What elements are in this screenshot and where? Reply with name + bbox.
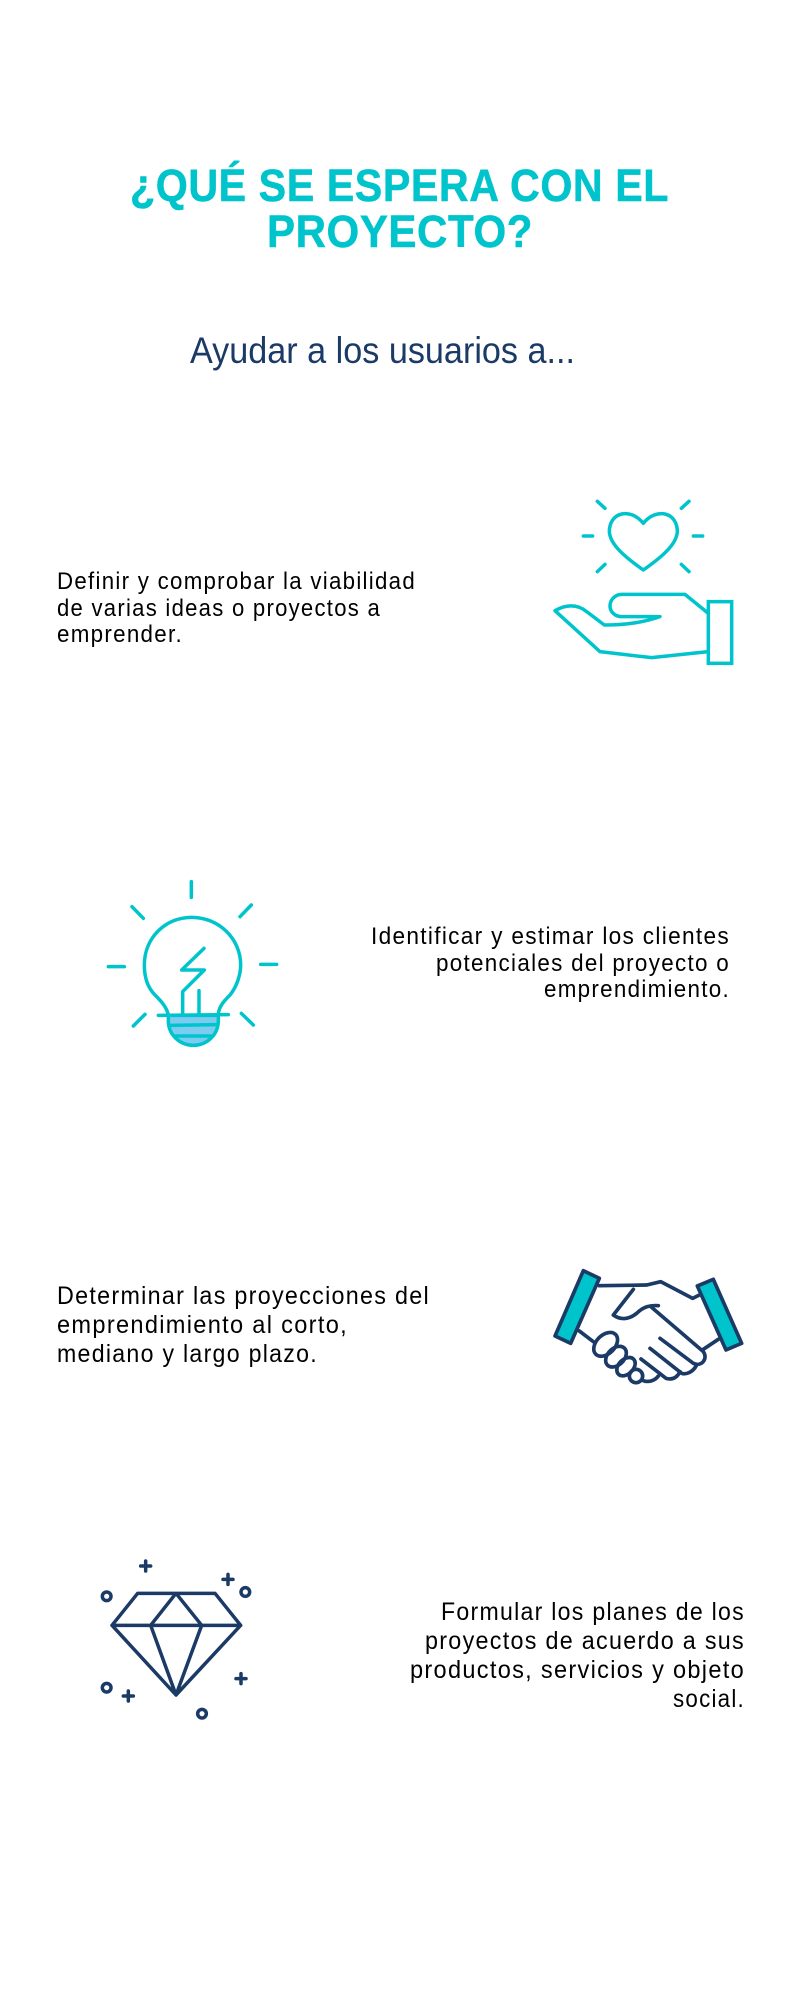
icon: diamond: [102, 1561, 250, 1718]
text block: definir: emprender.: [57, 621, 183, 648]
text block: formular: proyectos de acuerdo a sus: [425, 1627, 745, 1655]
subtitle: Ayudar a los usuarios a...: [190, 329, 575, 371]
title: [130, 160, 669, 257]
title: PROYECTO?: [267, 206, 533, 257]
icon: hand holding heart: [555, 501, 732, 663]
text block: determinar: Determinar las proyecciones del: [57, 1282, 430, 1310]
text block: formular: Formular los planes de los: [441, 1598, 745, 1626]
icon: light bulb: [108, 882, 277, 1045]
text block: definir: Definir y comprobar la viabilidad: [57, 568, 416, 595]
text block: identificar: emprendimiento.: [544, 976, 730, 1003]
title: ¿QUÉ SE ESPERA CON EL: [130, 160, 669, 211]
text block: formular: [410, 1598, 745, 1713]
text block: determinar: emprendimiento al corto,: [57, 1311, 348, 1339]
icon: handshake: [555, 1271, 742, 1383]
text block: determinar: [57, 1282, 430, 1368]
text block: determinar: mediano y largo plazo.: [57, 1340, 318, 1368]
text block: formular: productos, servicios y objeto: [410, 1656, 745, 1684]
text block: definir: [57, 568, 416, 648]
text block: identificar: potenciales del proyecto o: [436, 950, 730, 977]
text block: identificar: Identificar y estimar los clientes: [371, 923, 730, 950]
text block: identificar: [371, 923, 730, 1003]
text block: formular: social.: [673, 1685, 745, 1713]
text block: definir: de varias ideas o proyectos a: [57, 595, 381, 622]
